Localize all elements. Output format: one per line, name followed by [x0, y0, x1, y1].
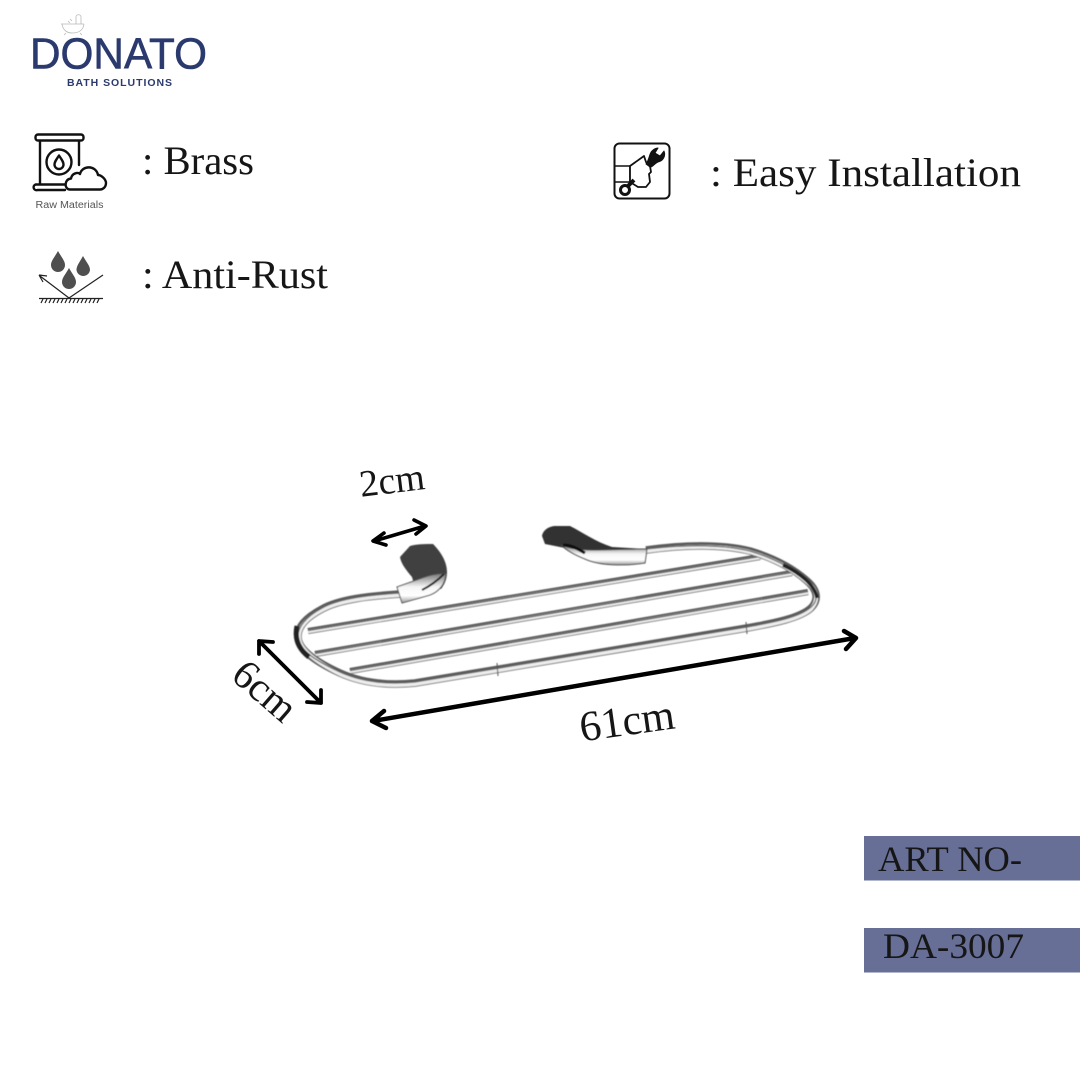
- deflection arrows: [39, 275, 103, 303]
- icon: bathtub: [61, 15, 84, 35]
- label box: model number: [864, 926, 1080, 972]
- drops: [51, 251, 90, 289]
- text: brass: : Brass: [142, 138, 254, 183]
- text: anti-rust: : Anti-Rust: [142, 252, 328, 297]
- left bracket: [397, 544, 447, 603]
- logo wordmark: DONATO: [30, 30, 207, 78]
- rack rails: [308, 556, 808, 672]
- dimension: 2cm: 2cm: [357, 456, 427, 506]
- right bracket: [542, 526, 647, 565]
- arrow: 2cm: [373, 520, 426, 545]
- label box: art no: ART NO-: [878, 839, 1022, 879]
- icon: raw materials barrel and cloud: [34, 134, 106, 190]
- arrow: 6cm: [259, 641, 321, 703]
- arrow: 61cm: [372, 631, 856, 728]
- label: raw materials: Raw Materials: [36, 200, 104, 211]
- product: towel rack: [296, 526, 817, 685]
- label box: model number: DA-3007: [883, 926, 1024, 966]
- text: easy installation: : Easy Installation: [710, 150, 1021, 195]
- logo: Donato Bath Solutions: [30, 15, 207, 89]
- dimension: 6cm: 6cm: [224, 650, 307, 731]
- logo tagline: BATH SOLUTIONS: [67, 77, 172, 89]
- icon: anti-rust drops: [39, 251, 103, 303]
- icon: easy installation: [614, 144, 670, 198]
- label box: art no: [864, 836, 1080, 880]
- dimension: 61cm: 61cm: [576, 692, 678, 751]
- rack frame: [296, 546, 817, 685]
